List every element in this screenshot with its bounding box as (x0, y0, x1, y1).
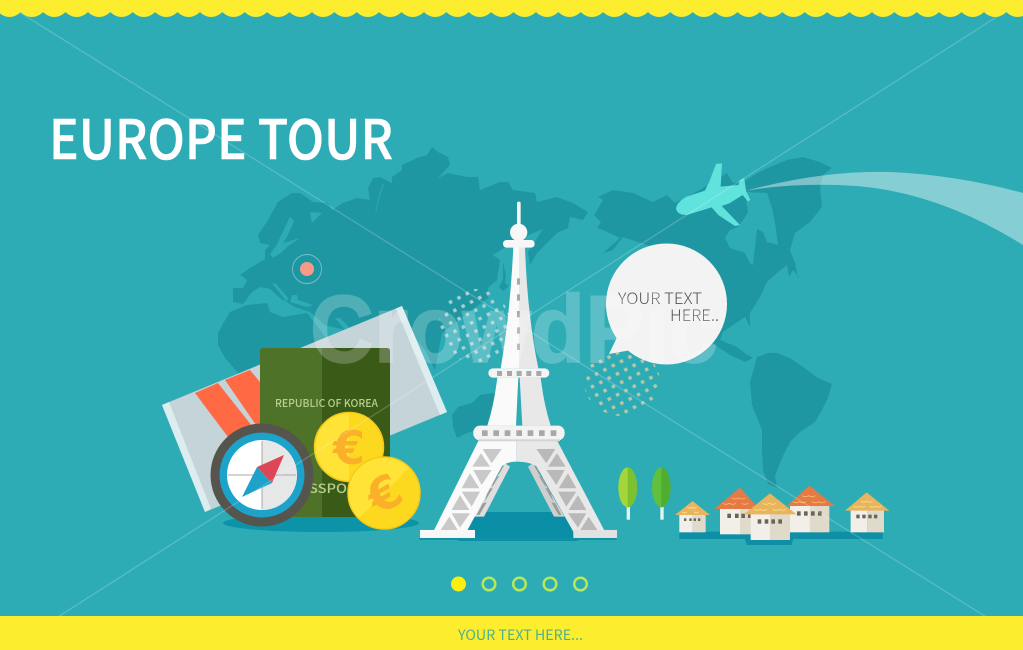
house 1 (675, 501, 710, 532)
halftone dots: lower (584, 348, 660, 416)
icon: Eiffel tower (419, 202, 617, 540)
icon: euro coin bottom: € (356, 462, 412, 526)
marker: location pin on Europe (292, 254, 322, 284)
house 3 (744, 493, 797, 540)
bottom band (0, 616, 1023, 650)
middle legs (487, 378, 551, 426)
footer text: YOUR TEXT HERE... (457, 625, 583, 645)
antenna and ball (503, 202, 535, 248)
map: North America (594, 157, 832, 362)
left truss (440, 449, 502, 531)
tower foot bar (420, 530, 617, 538)
icon: euro coin top (314, 412, 384, 482)
passport label: SSPO (309, 478, 347, 497)
village ground shadow (679, 532, 883, 545)
icon: euro coin bottom (348, 457, 420, 529)
flight trail (745, 172, 1023, 245)
house 5 (845, 492, 889, 532)
lower legs (433, 441, 605, 532)
speech bubble (606, 244, 727, 364)
second platform (488, 368, 549, 378)
bubble text line 1: YOUR TEXT (618, 285, 702, 309)
world map (218, 147, 832, 488)
icon: compass (210, 424, 314, 526)
map: South America (750, 353, 832, 488)
title: EUROPE TOUR (49, 96, 393, 175)
map: inland seas (270, 183, 778, 330)
watermark: CrowdPic (310, 276, 718, 383)
bubble text line 2: HERE.. (670, 302, 719, 326)
house 4 (787, 486, 835, 532)
upper shaft (501, 247, 538, 368)
tree 2 (652, 467, 671, 520)
icon: airplane (676, 163, 750, 226)
village (618, 467, 889, 545)
shadow under tower (458, 512, 578, 541)
icon: passport (260, 348, 390, 517)
icon: euro coin top: € (332, 421, 365, 475)
right truss (536, 449, 598, 531)
passport title: REPUBLIC OF KOREA (275, 395, 378, 411)
pagination dots (451, 576, 587, 592)
map: Eurasia (233, 147, 588, 370)
tree 1 (618, 467, 637, 520)
house 2 (714, 488, 759, 534)
icon: map ticket (162, 306, 447, 512)
top scalloped band (0, 0, 1023, 20)
shadow under passport (223, 514, 419, 532)
map: Africa (218, 303, 340, 420)
map: Australia (452, 393, 510, 438)
map: Japan (499, 262, 509, 291)
halftone dots: upper (439, 289, 511, 363)
rear legs (473, 463, 565, 517)
first platform (473, 426, 565, 441)
